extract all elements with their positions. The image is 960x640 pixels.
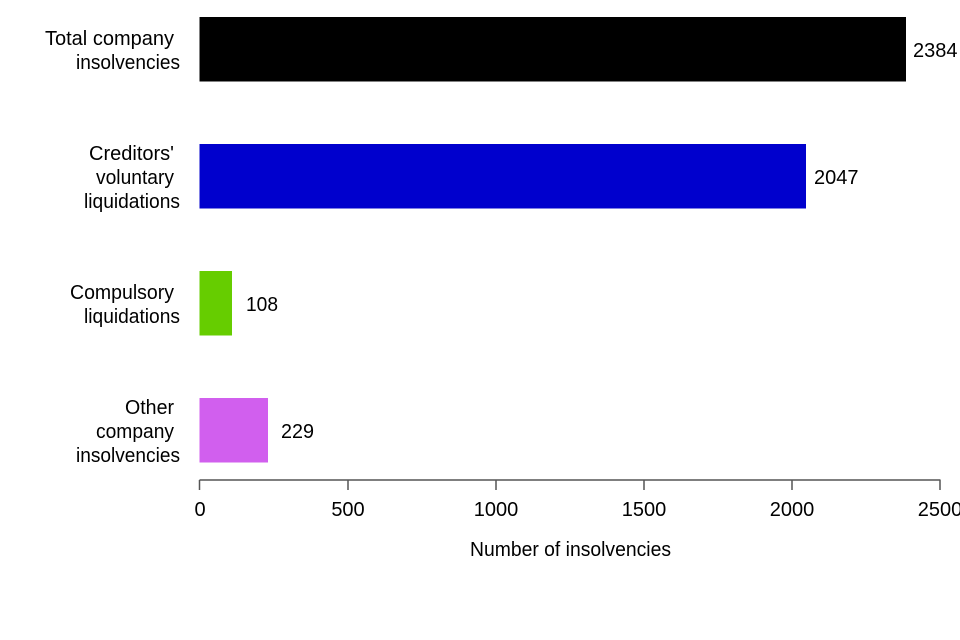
label: compulsory liquidations: liquidations: [84, 306, 180, 328]
bar: total company insolvencies: [200, 17, 906, 82]
axis tick labels: 1000: [474, 499, 518, 521]
value: 2047: 2047: [814, 167, 858, 189]
label: compulsory liquidations: [70, 282, 180, 328]
label: other company insolvencies: company: [96, 421, 174, 443]
axis tick labels: [194, 499, 960, 521]
label: total company insolvencies: [45, 28, 180, 74]
x axis title: Number of insolvencies: [470, 539, 671, 561]
value: 229: 229: [281, 421, 314, 443]
value: 2384: 2384: [913, 40, 958, 62]
category labels: [45, 28, 180, 467]
bar: compulsory liquidations: [200, 271, 232, 336]
bar: creditors' voluntary liquidations: [200, 144, 806, 208]
label: creditors' voluntary liquidations: voluntary: [96, 167, 174, 189]
value: 108: 108: [246, 294, 278, 316]
label: creditors' voluntary liquidations: [84, 143, 180, 213]
label: creditors' voluntary liquidations: Creditors': [89, 143, 174, 165]
x axis: [194, 480, 960, 521]
label: compulsory liquidations: Compulsory: [70, 282, 174, 304]
label: other company insolvencies: [76, 397, 180, 467]
value labels: [246, 40, 958, 443]
label: other company insolvencies: insolvencies: [76, 445, 180, 467]
axis tick labels: 0: [194, 499, 206, 521]
label: total company insolvencies: Total company: [45, 28, 174, 50]
label: other company insolvencies: Other: [125, 397, 174, 419]
label: creditors' voluntary liquidations: liquidations: [84, 191, 180, 213]
label: total company insolvencies: insolvencies: [76, 52, 180, 74]
bars: [200, 17, 906, 462]
bar: other company insolvencies: [200, 398, 268, 462]
axis tick labels: 2000: [770, 499, 814, 521]
axis tick labels: 500: [331, 499, 365, 521]
axis tick labels: 1500: [622, 499, 666, 521]
